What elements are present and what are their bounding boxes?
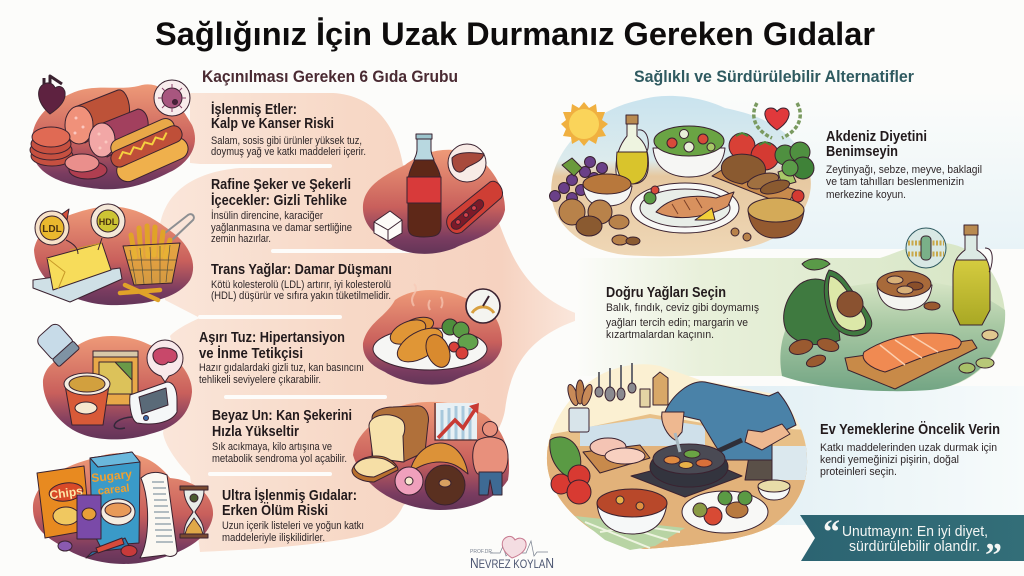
- icon: gauge: [466, 289, 500, 323]
- icon: HDL badge: HDL: [99, 217, 118, 227]
- text: sugary drinks: İnsülin direncine, karaciğer: [211, 209, 323, 222]
- text: white flour: metabolik sendroma yol açabilir.: [212, 453, 347, 465]
- text: processed meats: Salam, sosis gibi ürünler yüksek tuz,: [211, 135, 362, 147]
- text: ultra-processed foods: Ultra İşlenmiş Gıdalar:: [222, 487, 357, 504]
- nuts bowl: [877, 271, 932, 310]
- text: trans fats: [211, 261, 392, 302]
- avocado half: [824, 270, 872, 336]
- icon: heart with laurel: [754, 103, 800, 138]
- callout: reminder banner: [800, 514, 1024, 574]
- cereal box: Sugary: [91, 467, 133, 485]
- pecans and almonds: [788, 302, 998, 373]
- logo: PROF.DR.: [470, 549, 493, 555]
- heading: healthy alternatives: Sağlıklı ve Sürdürülebilir Alternatifler: [634, 68, 915, 86]
- icon: blood pressure monitor: [114, 382, 177, 429]
- plate: [373, 328, 487, 370]
- text: processed meats: doymuş yağ ve katkı maddeleri içerir.: [211, 146, 366, 158]
- olive oil bottle: [953, 225, 992, 325]
- sugar cube: [374, 211, 402, 241]
- broccoli: [775, 142, 814, 186]
- text: white flour: Beyaz Un: Kan Şekerini: [212, 407, 352, 424]
- lentil bowl: [583, 174, 632, 206]
- panel: excess salt: [35, 322, 192, 439]
- logo: [470, 536, 554, 572]
- text: white flour: Hızla Yükseltir: [212, 423, 299, 440]
- cereal box: careal: [97, 482, 130, 498]
- text: home cooking: kendi yemeğinizi pişirin, doğal: [820, 454, 959, 466]
- text: processed meats: Kalp ve Kanser Riski: [211, 115, 334, 132]
- text: sugary drinks: [211, 176, 352, 245]
- cook figure: [662, 382, 796, 480]
- icon: salt shaker: [35, 322, 80, 367]
- text: home cooking: Ev Yemeklerine Öncelik Verin: [820, 421, 1000, 438]
- text: sugary drinks: yağlanmasına ve damar sertliğine: [211, 222, 352, 234]
- panel: ultra-processed foods: [33, 452, 213, 564]
- croissant: [410, 443, 468, 474]
- icon: LDL badge: [35, 209, 78, 254]
- text: Mediterranean diet: [826, 128, 982, 201]
- chickpea bowl: [748, 198, 804, 238]
- grapes: [550, 156, 608, 204]
- olive oil bottle: [616, 115, 648, 184]
- text: white flour: Sık acıkmaya, kilo artışına ve: [212, 441, 332, 453]
- text: trans fats: Kötü kolesterolü (LDL) artırır, iyi kolesterolü: [211, 279, 391, 291]
- arrow band: peach flow from risks toward alternatives: [160, 93, 587, 552]
- text: ultra-processed foods: maddeleriyle ilişkilidirler.: [222, 532, 325, 544]
- text: home cooking: Katkı maddelerinden uzak durmak için: [820, 442, 997, 454]
- text: excess salt: Hazır gıdalardaki gizli tuz, kan basıncını: [199, 362, 364, 374]
- text: sugary drinks: zemin hazırlar.: [211, 233, 271, 245]
- steam: [412, 284, 442, 310]
- text: healthy fats: [606, 284, 759, 341]
- stove: [631, 458, 742, 497]
- frying pan with vegetables: [650, 433, 742, 487]
- text: healthy fats: yağları tercih edin; margarin ve: [606, 317, 748, 329]
- icon: sun: [561, 102, 608, 146]
- walnuts: [559, 199, 751, 245]
- soup bowl: [597, 489, 667, 534]
- text: processed meats: [211, 101, 366, 158]
- panel: trans fats: [33, 204, 194, 305]
- text: ultra-processed foods: Erken Ölüm Riski: [222, 502, 328, 519]
- text: processed meats: İşlenmiş Etler:: [211, 101, 297, 118]
- text: sugary drinks: İçecekler: Gizli Tehlike: [211, 192, 347, 209]
- icon: hourglass: [180, 486, 208, 538]
- text: excess salt: ve İnme Tetikçisi: [199, 345, 303, 362]
- salami slices: [30, 127, 107, 179]
- avocado whole: [784, 259, 840, 345]
- salami logs: [65, 90, 148, 157]
- food package: [93, 351, 138, 405]
- text: healthy fats: kızartmalardan kaçının.: [606, 329, 714, 341]
- panel: sugary drinks: [363, 134, 505, 254]
- icon: cola bottle: [407, 134, 441, 237]
- towel: [575, 516, 685, 550]
- greens and tomatoes: [550, 437, 591, 504]
- title: Sağlığınız İçin Uzak Durmanız Gereken Gıdalar: [155, 16, 875, 52]
- icon: LDL badge: LDL: [42, 224, 62, 235]
- callout: reminder banner: Unutmayın: En iyi diyet,: [842, 524, 988, 540]
- icon: liver badge: [448, 144, 486, 182]
- text: Mediterranean diet: Zeytinyağı, sebze, meyve, baklagil: [826, 164, 982, 176]
- bread on board: [712, 154, 796, 200]
- text: healthy fats: Doğru Yağları Seçin: [606, 284, 726, 301]
- text: Mediterranean diet: Akdeniz Diyetini: [826, 128, 927, 145]
- panel: healthy fats: [575, 225, 1005, 391]
- salmon on cutting board: [845, 333, 977, 389]
- chicken pieces: [387, 314, 455, 371]
- panel: home cooking: [540, 363, 810, 550]
- tomato small: [792, 190, 804, 202]
- text: ultra-processed foods: Uzun içerik listeleri ve yoğun katkı: [222, 520, 364, 532]
- noodle cup: [64, 373, 110, 425]
- icon: overweight person: [473, 422, 508, 495]
- icon: cell membrane: [906, 228, 946, 268]
- panel: processed meats: [30, 76, 195, 189]
- ingredient list receipt: [140, 472, 177, 558]
- callout: reminder banner: “: [823, 514, 840, 551]
- fish plate: [631, 183, 739, 233]
- kitchen counters and cabinets: [540, 414, 810, 550]
- text: excess salt: [199, 329, 364, 386]
- text: excess salt: Aşırı Tuz: Hipertansiyon: [199, 329, 345, 346]
- chips bag: [37, 466, 90, 538]
- text: trans fats: Trans Yağlar: Damar Düşmanı: [211, 261, 392, 278]
- salad bowl: [653, 126, 725, 177]
- utensils and jar: [566, 363, 668, 432]
- text: Mediterranean diet: merkezine koyun.: [826, 189, 906, 201]
- bread slice: [352, 456, 398, 482]
- panel: fried chicken plate: [363, 284, 502, 385]
- fries basket: [123, 214, 194, 285]
- small bowl: [758, 480, 790, 500]
- icon: brain bubble: [147, 340, 183, 382]
- icon: virus badge: [154, 80, 190, 116]
- candies: [58, 541, 137, 556]
- text: healthy fats: Balık, fındık, ceviz gibi doymamış: [606, 302, 759, 314]
- text: home cooking: proteinleri seçin.: [820, 466, 897, 478]
- cereal box: [90, 452, 140, 546]
- panel: white flour: [352, 402, 509, 510]
- candy bar: [77, 495, 130, 558]
- hot dog: [104, 114, 192, 185]
- text: ultra-processed foods: [222, 487, 364, 544]
- panel: Mediterranean diet: [550, 96, 814, 256]
- icon: clogged artery: [447, 181, 503, 233]
- bar chart with rising arrow: [435, 403, 479, 440]
- butter on dish: [33, 243, 122, 302]
- logo: NEVREZ KOYLAN: [470, 555, 554, 572]
- donuts: [395, 465, 465, 505]
- text: Mediterranean diet: ve tam tahılları beslenmenizin: [826, 176, 964, 188]
- text: home cooking: [820, 421, 1000, 478]
- heading: foods to avoid: Kaçınılması Gereken 6 Gıda Grubu: [202, 68, 458, 86]
- crossed fries: [120, 285, 160, 300]
- icon: HDL badge: [91, 204, 125, 250]
- band: blue behind home cooking: [700, 386, 1024, 525]
- bread loaf: [369, 406, 428, 462]
- text: sugary drinks: Rafine Şeker ve Şekerli: [211, 176, 351, 193]
- callout: reminder banner: ”: [985, 537, 1002, 574]
- chicken on board: [583, 438, 650, 473]
- tomatoes: [729, 133, 779, 170]
- icon: heart: [39, 76, 65, 114]
- text: trans fats: (HDL) düşürür ve sıfıra yakın tüketilmelidir.: [211, 290, 391, 302]
- broccoli and tomato: [442, 319, 478, 359]
- grilled vegetables plate: [682, 491, 768, 533]
- callout: reminder banner: sürdürülebilir olandır.: [849, 539, 980, 555]
- text: white flour: [212, 407, 352, 465]
- chips bag: Chips: [49, 484, 84, 502]
- text: excess salt: tehlikeli seviyelere çıkarabilir.: [199, 374, 321, 386]
- text: Mediterranean diet: Benimseyin: [826, 143, 898, 160]
- band: blue behind Mediterranean diet: [700, 90, 1024, 249]
